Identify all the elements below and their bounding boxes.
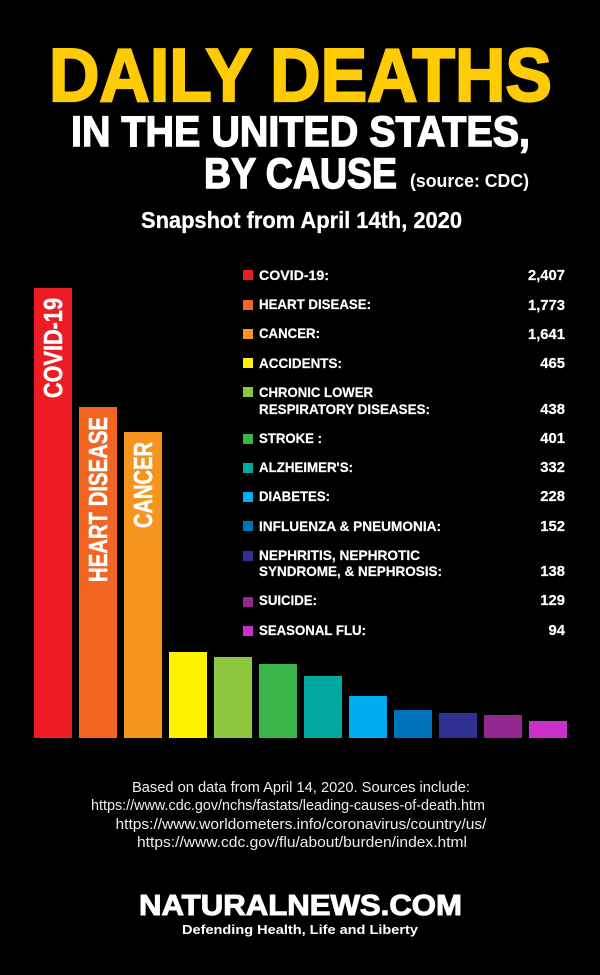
bar: nephritis <box>439 713 477 738</box>
legend row: chronic lower respiratory diseases: 438 <box>540 402 565 418</box>
subtitle: in the united states: IN THE UNITED STATES, <box>71 108 530 156</box>
brand tagline: Defending Health, Life and Liberty <box>182 922 419 937</box>
legend row: chronic lower respiratory diseases <box>243 384 565 418</box>
legend row: diabetes: DIABETES: <box>259 488 330 504</box>
legend row: cancer: CANCER: <box>259 325 320 341</box>
legend row: nephritis, nephrotic syndrome, nephrosis: SYNDROME, & NEPHROSIS: <box>259 563 442 579</box>
legend row: heart disease: 1,773 <box>528 298 565 314</box>
legend row: chronic lower respiratory diseases: RESPIRATORY DISEASES: <box>259 401 430 417</box>
bar chart <box>34 288 567 738</box>
sources text block: Based on data from April 14, 2020. Sources include: <box>132 780 470 796</box>
title: daily deaths: DAILY DEATHS <box>49 33 552 117</box>
legend row: alzheimer's: 332 <box>540 460 565 476</box>
legend row: heart disease <box>243 296 565 314</box>
bar label: heart disease: HEART DISEASE <box>83 417 113 582</box>
legend row: nephritis, nephrotic syndrome, nephrosis: NEPHRITIS, NEPHROTIC <box>259 547 420 563</box>
subtitle: by cause: BY CAUSE <box>204 150 397 198</box>
bar: accidents <box>169 652 207 738</box>
legend row: nephritis, nephrotic syndrome, nephrosis: 138 <box>540 564 565 580</box>
brand: naturalnews.com: NATURALNEWS.COM <box>139 890 462 922</box>
bar: alzheimer's <box>304 676 342 738</box>
legend row: nephritis, nephrotic syndrome, nephrosis <box>243 547 565 580</box>
legend row: covid-19: COVID-19: <box>259 267 329 283</box>
legend row: stroke: 401 <box>540 431 565 447</box>
sources text block: https://www.cdc.gov/nchs/fastats/leading-causes-of-death.htm <box>91 798 485 814</box>
sources text block: https://www.cdc.gov/flu/about/burden/index.html <box>137 835 467 851</box>
legend row: chronic lower respiratory diseases: CHRONIC LOWER <box>259 384 373 400</box>
legend row: influenza and pneumonia <box>243 518 565 535</box>
legend row: cancer <box>243 325 565 343</box>
legend row: diabetes <box>243 488 565 505</box>
bar: heart disease <box>79 407 117 738</box>
bar: suicide <box>484 715 522 738</box>
legend row: suicide: 129 <box>540 593 565 609</box>
source note: (source: CDC) <box>410 171 529 191</box>
legend row: suicide: SUICIDE: <box>259 592 317 608</box>
legend row: alzheimer's: ALZHEIMER'S: <box>259 459 353 475</box>
bar: covid-19 <box>34 288 72 738</box>
legend row: alzheimer's <box>243 459 565 476</box>
bar: cancer <box>124 432 162 738</box>
bar: chronic lower respiratory diseases <box>214 657 252 738</box>
bar label: cancer: CANCER <box>128 442 158 528</box>
legend row: heart disease: HEART DISEASE: <box>259 296 371 312</box>
legend row: influenza and pneumonia: INFLUENZA & PNEUMONIA: <box>259 518 441 534</box>
legend row: suicide <box>243 592 565 609</box>
legend row: stroke <box>243 430 565 447</box>
legend row: seasonal flu: SEASONAL FLU: <box>259 622 366 638</box>
legend row: diabetes: 228 <box>540 489 565 505</box>
legend row: covid-19: 2,407 <box>528 268 565 284</box>
legend row: covid-19 <box>243 267 565 284</box>
legend <box>243 267 566 639</box>
bar: diabetes <box>349 696 387 738</box>
legend row: seasonal flu: 94 <box>549 623 566 639</box>
bar label: covid-19: COVID-19 <box>38 298 68 398</box>
bar: influenza and pneumonia <box>394 710 432 738</box>
legend row: accidents <box>243 355 565 372</box>
snapshot date: Snapshot from April 14th, 2020 <box>141 207 462 233</box>
legend row: accidents: ACCIDENTS: <box>259 355 342 371</box>
bar: seasonal flu <box>529 721 567 738</box>
legend row: accidents: 465 <box>540 356 565 372</box>
legend row: cancer: 1,641 <box>528 327 565 343</box>
legend row: stroke: STROKE : <box>259 430 322 446</box>
sources text block: https://www.worldometers.info/coronavirus/country/us/ <box>116 817 487 833</box>
sources text block <box>91 780 487 851</box>
legend row: influenza and pneumonia: 152 <box>540 519 565 535</box>
bar: stroke <box>259 664 297 738</box>
legend row: seasonal flu <box>243 622 566 639</box>
